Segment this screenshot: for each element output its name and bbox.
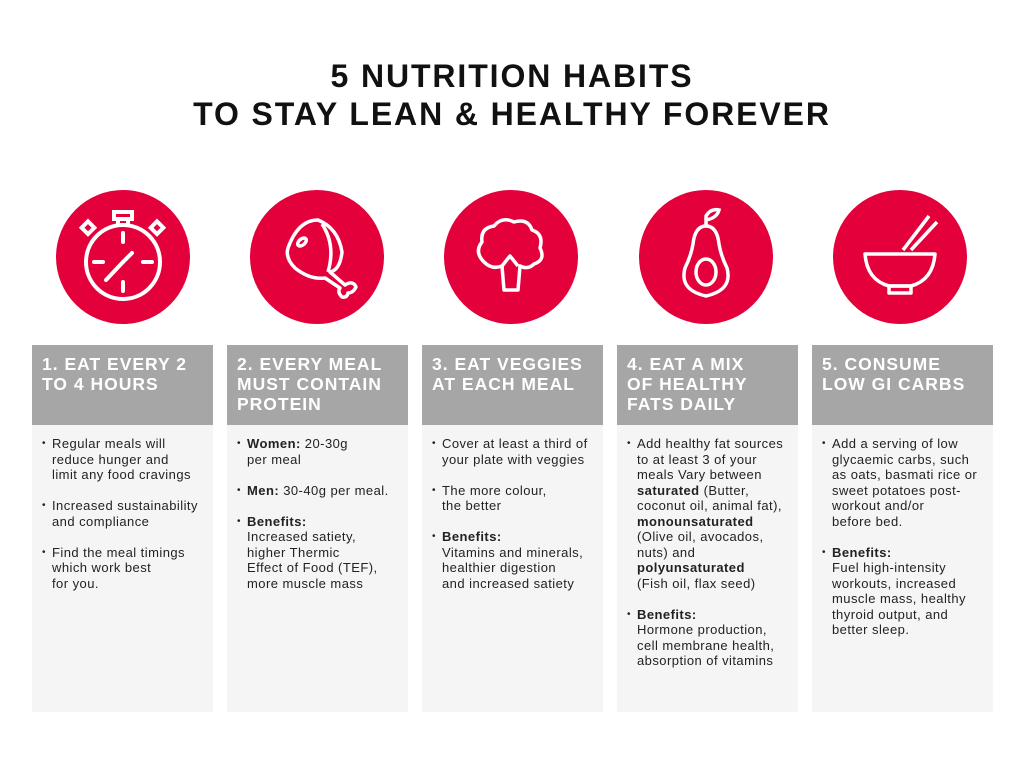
icon: ham [250,190,384,324]
heading 4 [617,345,798,425]
text 5: Fuel high-intensity [832,560,946,575]
text 5: Add a serving of low [832,436,958,451]
text 1: Find the meal timings [52,544,185,560]
icon: bowl with chopsticks [833,190,967,324]
text 4: Add healthy fat sources [637,436,783,451]
text 2: Increased satiety, [247,529,356,544]
text 3: healthier digestion [442,560,556,575]
panel: habit 4 [617,345,798,712]
text 2: higher Thermic [247,544,340,560]
text 3: and increased satiety [442,576,574,590]
heading 1: TO 4 HOURS [42,374,159,394]
text 5: glycaemic carbs, such [832,452,969,466]
text 4: nuts) and [637,544,695,560]
heading 2: 2. EVERY MEAL [237,354,382,374]
text 4: polyunsaturated [637,560,745,575]
text 1: and compliance [52,514,149,528]
text 2: Benefits: [247,514,307,528]
icon: avocado [639,190,773,324]
text 4: cell membrane health, [637,638,774,652]
text 3: the better [442,498,501,513]
text 5: workouts, increased [832,576,956,590]
heading 5: 5. CONSUME [822,354,941,374]
text 5: workout and/or [832,498,924,513]
text 5: before bed. [832,514,903,528]
text 4: Hormone production, [637,622,767,637]
text 4: Benefits: [637,606,697,622]
text 4: absorption of vitamins [637,653,773,668]
text 2: Men: 30-40g per meal. [247,482,389,498]
text 1 [42,436,198,590]
heading 2: PROTEIN [237,394,322,414]
heading 5: LOW GI CARBS [822,374,965,394]
text 5: muscle mass, healthy [832,591,966,606]
panel: habit 2 [227,345,408,712]
text 4: meals Vary between [637,467,762,482]
heading 2 [227,345,408,425]
panel: habit 3 [422,345,603,712]
text 2: per meal [247,452,301,466]
text 4: monounsaturated [637,514,754,528]
heading 2: MUST CONTAIN [237,374,382,394]
text 5: sweet potatoes post- [832,482,961,498]
heading 3 [422,345,603,425]
heading 1: 1. EAT EVERY 2 [42,354,187,374]
heading 4: 4. EAT A MIX [627,354,744,374]
text 4: saturated (Butter, [637,482,749,498]
title: 5 NUTRITION HABITS [330,58,694,94]
text 3: Cover at least a third of [442,436,588,451]
title [193,58,831,132]
heading 1 [32,345,213,425]
text 1: which work best [52,560,151,575]
text 1: for you. [52,576,99,590]
text 5: as oats, basmati rice or [832,467,977,482]
text 3 [432,436,588,590]
text 3: Benefits: [442,529,502,544]
title: TO STAY LEAN & HEALTHY FOREVER [193,96,831,132]
text 1: Increased sustainability [52,498,198,513]
text 2: more muscle mass [247,576,363,590]
icon: broccoli [444,190,578,324]
text 4: coconut oil, animal fat), [637,498,782,513]
heading 3: 3. EAT VEGGIES [432,354,583,374]
text 2 [237,436,389,590]
text 4 [627,436,783,668]
text 4: to at least 3 of your [637,452,757,466]
heading 5 [812,345,993,425]
text 1: limit any food cravings [52,467,191,482]
text 4: (Fish oil, flax seed) [637,576,756,590]
icon: stopwatch [56,190,190,324]
text 5: better sleep. [832,622,909,637]
text 2: Effect of Food (TEF), [247,560,378,575]
text 5: Benefits: [832,544,892,560]
text 3: The more colour, [442,482,547,498]
text 5 [822,436,977,637]
heading 3: AT EACH MEAL [432,374,575,394]
heading 4: FATS DAILY [627,394,736,414]
panel: habit 1 [32,345,213,712]
text 3: your plate with veggies [442,452,585,466]
text 2: Women: 20-30g [247,436,348,451]
text 5: thyroid output, and [832,606,948,622]
heading 4: OF HEALTHY [627,374,748,394]
text 4: (Olive oil, avocados, [637,529,764,544]
text 3: Vitamins and minerals, [442,544,583,560]
panel: habit 5 [812,345,993,712]
text 1: Regular meals will [52,436,166,451]
text 1: reduce hunger and [52,452,169,466]
